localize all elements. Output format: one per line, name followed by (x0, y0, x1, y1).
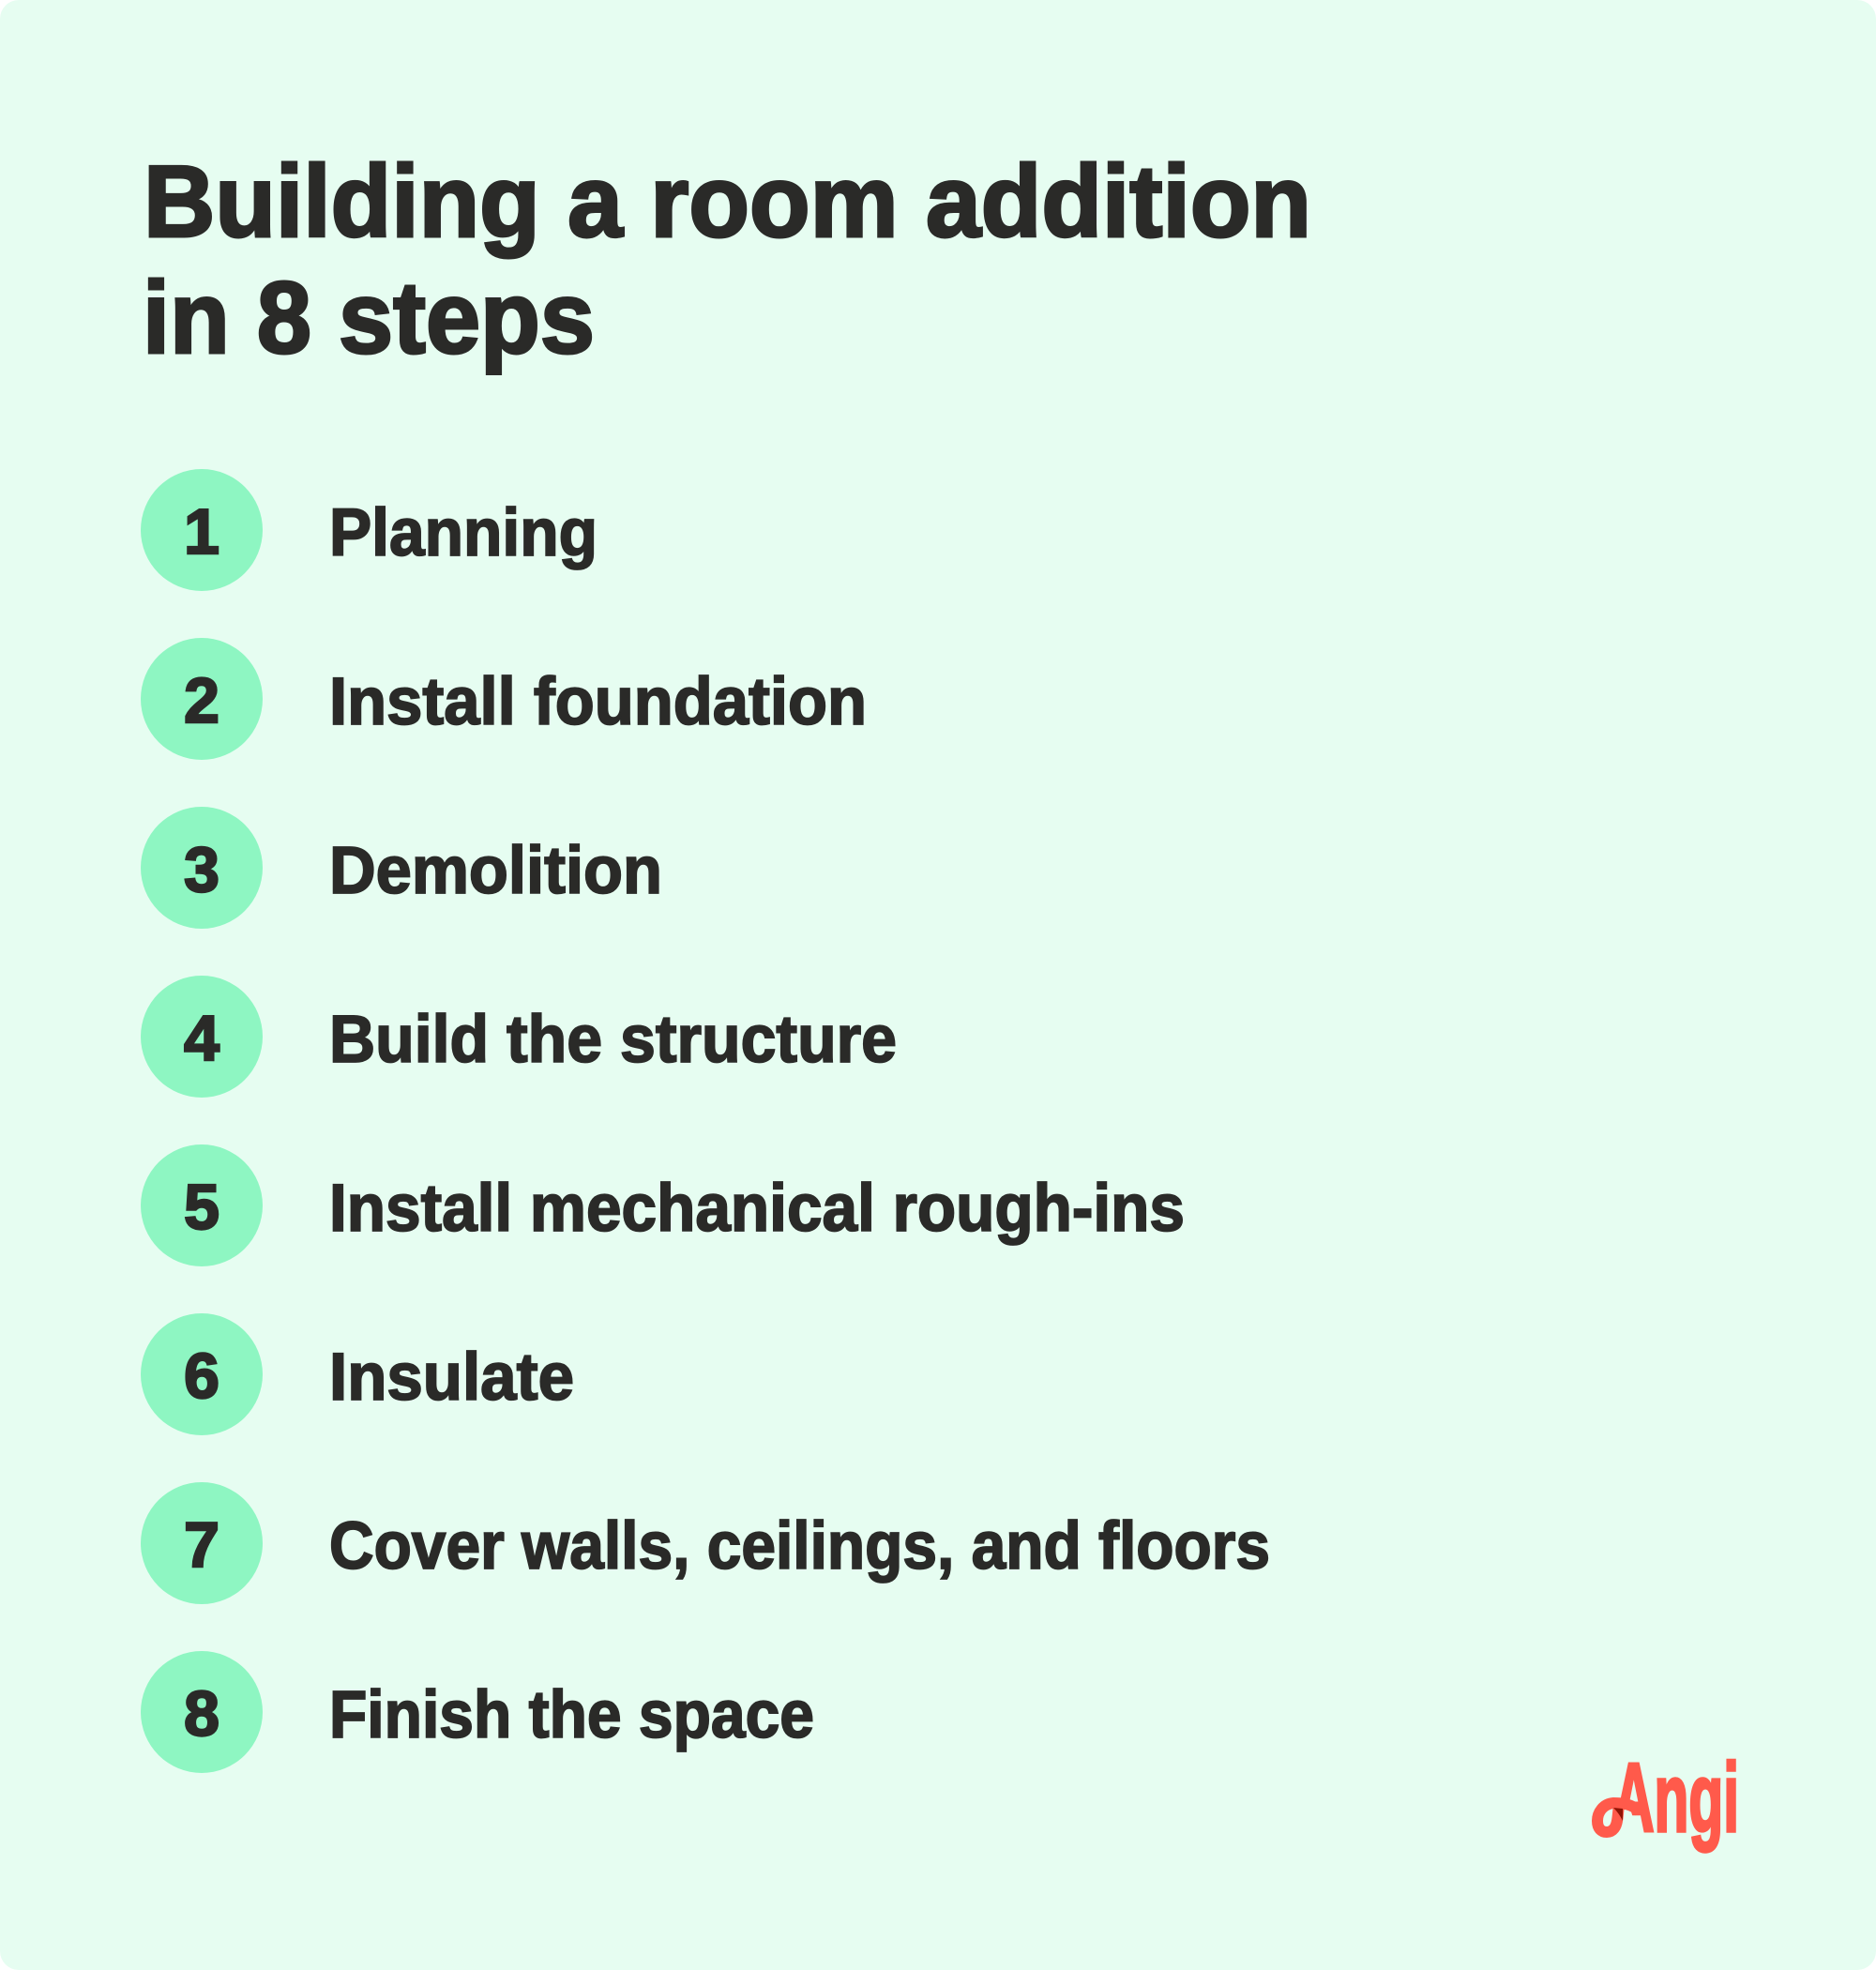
step 3: 3 (184, 834, 219, 905)
step 2: 2 (184, 665, 219, 736)
step 6: Insulate (329, 1341, 574, 1415)
title: Building a room addition (144, 144, 1311, 259)
step 1 (141, 469, 598, 591)
step 4: Build the structure (329, 1003, 897, 1077)
step list (141, 469, 1270, 1773)
step 1: Planning (329, 496, 598, 570)
step 5: Install mechanical rough-ins (329, 1172, 1185, 1246)
step 5: 5 (184, 1172, 219, 1243)
step 6: 6 (184, 1341, 219, 1412)
step 6 (141, 1313, 574, 1435)
icon: Angi logo: Angi (1613, 1744, 1739, 1853)
title: in 8 steps (143, 261, 595, 375)
step 4: 4 (184, 1003, 219, 1074)
step 4 (141, 976, 897, 1098)
step 8 (141, 1651, 814, 1773)
step 7: 7 (184, 1509, 219, 1581)
title (143, 144, 1311, 375)
step 8: 8 (184, 1678, 219, 1750)
step 7 (141, 1482, 1270, 1604)
step 7: Cover walls, ceilings, and floors (329, 1509, 1270, 1584)
step 2 (141, 638, 867, 760)
step 3 (141, 807, 662, 929)
step 3: Demolition (329, 834, 662, 908)
step 1: 1 (184, 496, 219, 568)
step 8: Finish the space (329, 1678, 814, 1752)
step 5 (141, 1144, 1185, 1266)
step 2: Install foundation (329, 665, 867, 739)
icon: Angi logo (1590, 1744, 1739, 1853)
